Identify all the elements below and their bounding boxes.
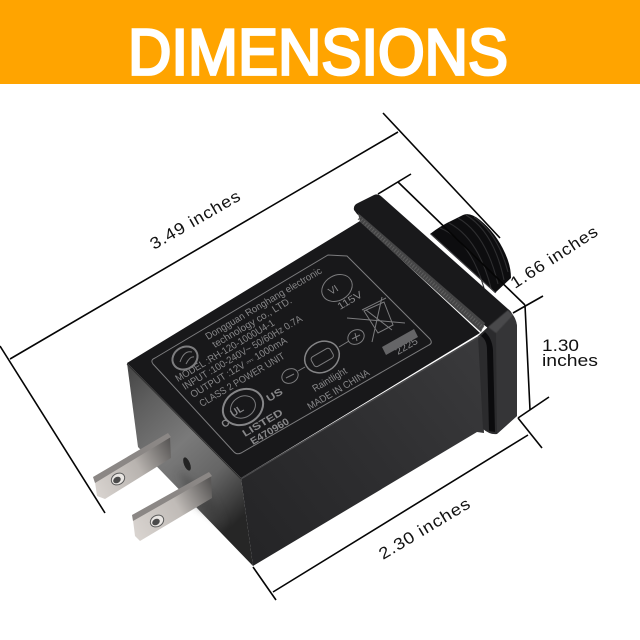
prong: top blade [93,433,171,499]
left face [127,363,253,566]
dimension: width 1.66 inches [378,174,602,305]
label text: INPUT :100-240V~ 50/60Hz 0.7A [181,314,305,392]
label text: technology co., LTD. [211,296,294,350]
title: DIMENSIONS [128,16,508,89]
ground slot [182,456,192,472]
icon: VI mark: VI [327,284,341,297]
flange top [354,194,512,328]
label: 1.66 inches: 1.66 inches [507,222,602,292]
label text: MADE IN CHINA [306,368,372,412]
label text: Dongguan Ronghang electronic [204,266,324,342]
label text: C [220,418,232,430]
icon: crossed bin [347,297,405,342]
top face [127,221,480,478]
icon: brand logo [168,342,202,374]
label text: Raintlight [311,366,350,394]
label text: CLASS 2 POWER UNIT [198,351,287,409]
label text: MODEL :RH-120-1000U4-1 [174,318,277,384]
label text: E470960 [249,416,292,447]
label text: OUTPUT :12V ⎓ 1000mA [189,335,290,400]
label text [174,266,421,447]
icon: VI mark [317,269,357,307]
dimension: base 2.30 inches [253,418,542,600]
dimension: height 1.30 inches: inches [542,352,598,370]
label: 3.49 inches: 3.49 inches [147,187,244,253]
connector [430,214,511,293]
label text: LISTED [241,408,285,439]
prong: bottom blade [132,472,212,541]
label outline [152,255,431,454]
title banner [0,0,640,89]
product label [152,255,431,454]
label text: US [265,387,286,404]
label text: 115V [336,289,365,312]
label: 2.30 inches: 2.30 inches [376,494,474,563]
dimension: height 1.30 inches [513,296,598,418]
side face [241,335,484,566]
icon: bar [382,329,418,355]
label text: 2225 [394,336,421,357]
icon: rain light circuit [279,327,367,386]
icon: UL mark: UL [229,404,246,419]
power adapter [93,194,517,566]
flange side [478,310,517,434]
label: 1.30 inches: 1.30 [542,337,579,355]
groove [358,213,485,332]
icon: UL mark [216,382,270,432]
